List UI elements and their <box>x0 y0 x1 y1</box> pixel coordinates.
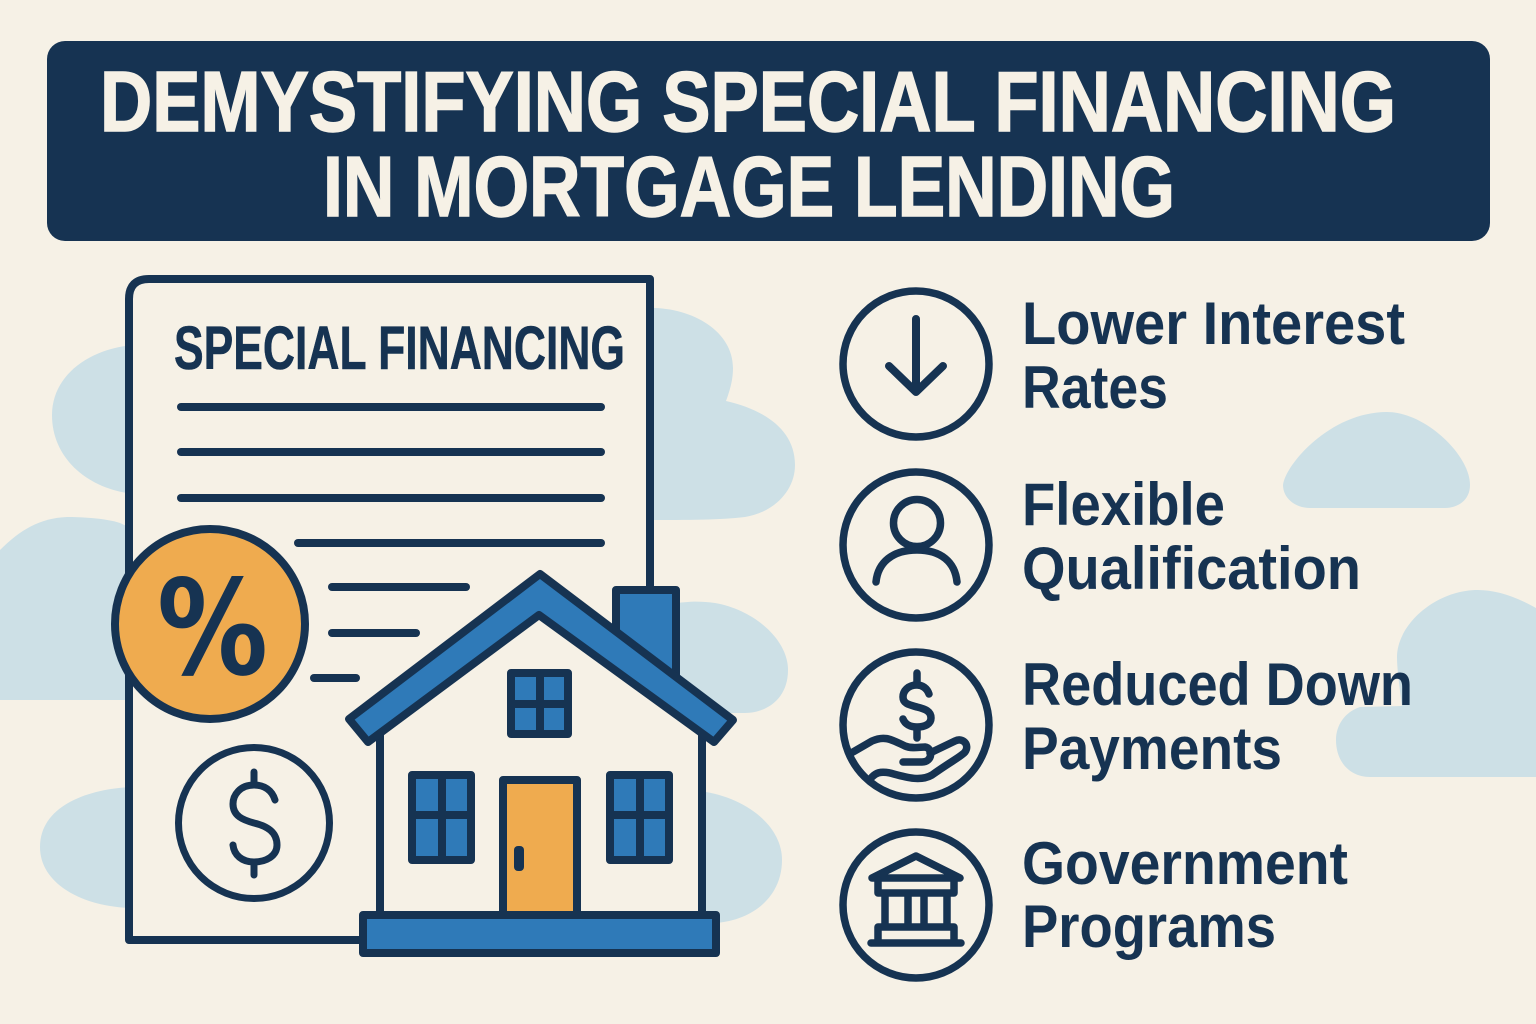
icon: dollar coin <box>178 748 330 898</box>
benefit: lower interest rates <box>843 290 1405 437</box>
label: Payments <box>1022 715 1282 782</box>
roof <box>349 574 733 742</box>
icon: bank building <box>843 832 989 978</box>
document heading: SPECIAL FINANCING <box>174 314 625 382</box>
benefit: government programs <box>843 830 1348 978</box>
icon: percent badge: % <box>157 552 268 706</box>
benefit: flexible qualification <box>843 471 1361 618</box>
title line 2: IN MORTGAGE LENDING <box>323 140 1175 235</box>
label: Reduced Down <box>1022 651 1413 718</box>
label: Qualification <box>1022 535 1361 602</box>
icon: person <box>843 472 989 618</box>
house illustration <box>349 574 733 953</box>
label: Flexible <box>1022 471 1225 538</box>
label: Government <box>1022 830 1348 897</box>
label: Lower Interest <box>1022 290 1405 357</box>
label: Rates <box>1022 354 1168 421</box>
left window <box>412 775 471 860</box>
benefit: reduced down payments <box>843 651 1413 798</box>
house body <box>380 600 702 915</box>
icon: hand with dollar <box>843 652 989 798</box>
title banner <box>47 41 1490 241</box>
icon: percent badge <box>115 529 305 719</box>
attic window <box>511 673 568 734</box>
background clouds <box>0 308 1536 923</box>
document text lines <box>181 407 601 678</box>
foundation <box>363 915 716 953</box>
document illustration <box>115 279 650 940</box>
door <box>503 780 577 915</box>
chimney <box>616 590 676 680</box>
right window <box>610 775 669 860</box>
label: Programs <box>1022 893 1276 960</box>
icon: down arrow <box>843 291 989 437</box>
